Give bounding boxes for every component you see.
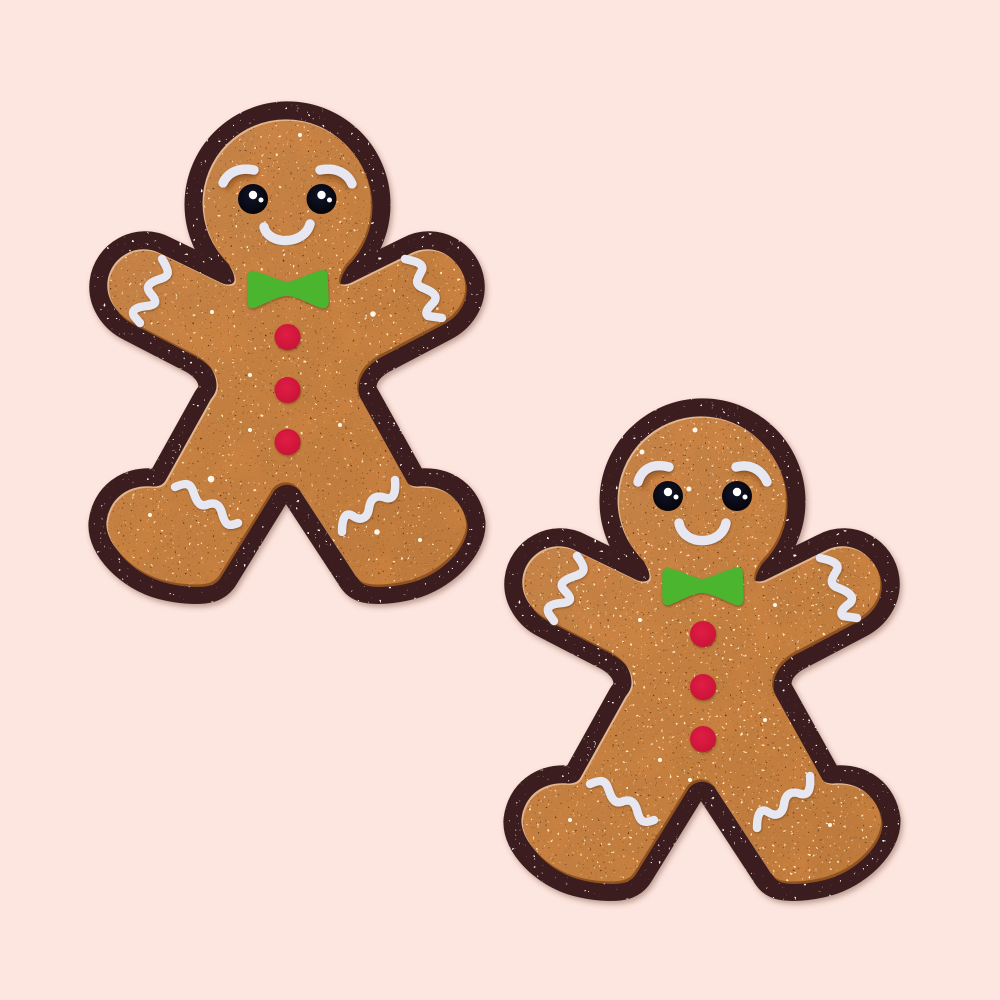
cookie body — [515, 412, 890, 887]
icing: left hand — [133, 259, 168, 323]
smile — [264, 224, 310, 241]
bow tie — [248, 271, 328, 308]
button 3 — [690, 726, 716, 752]
right eyebrow — [732, 464, 771, 488]
button 1 — [274, 324, 300, 350]
left eye — [653, 481, 683, 511]
button 2 — [690, 674, 716, 700]
outline speckles — [495, 392, 910, 912]
icing: left hand — [548, 556, 584, 621]
bow tie — [663, 568, 743, 605]
button 1 — [690, 621, 716, 647]
right eyebrow — [316, 169, 356, 190]
cookie dark outline — [523, 418, 881, 881]
right eye — [722, 481, 752, 511]
icing: left foot — [590, 781, 654, 822]
left eyebrow — [219, 169, 258, 192]
outline speckles — [80, 95, 495, 615]
cookie body — [100, 115, 475, 590]
icing: left foot — [175, 484, 238, 525]
right eye — [306, 184, 336, 214]
icing: right hand — [820, 558, 857, 618]
glitter dots — [568, 428, 832, 827]
left eyebrow — [634, 464, 673, 490]
icing: right foot — [757, 776, 810, 828]
button 3 — [274, 429, 300, 455]
left eye — [238, 184, 268, 214]
smile — [679, 523, 726, 541]
gingerbread cookie: upper left — [80, 95, 495, 615]
glitter dots — [148, 133, 422, 542]
button 2 — [274, 377, 300, 403]
icing: right foot — [342, 480, 395, 532]
gingerbread cookie: lower right — [495, 392, 910, 912]
icing: right hand — [405, 259, 442, 318]
cookie dark outline — [108, 121, 466, 584]
